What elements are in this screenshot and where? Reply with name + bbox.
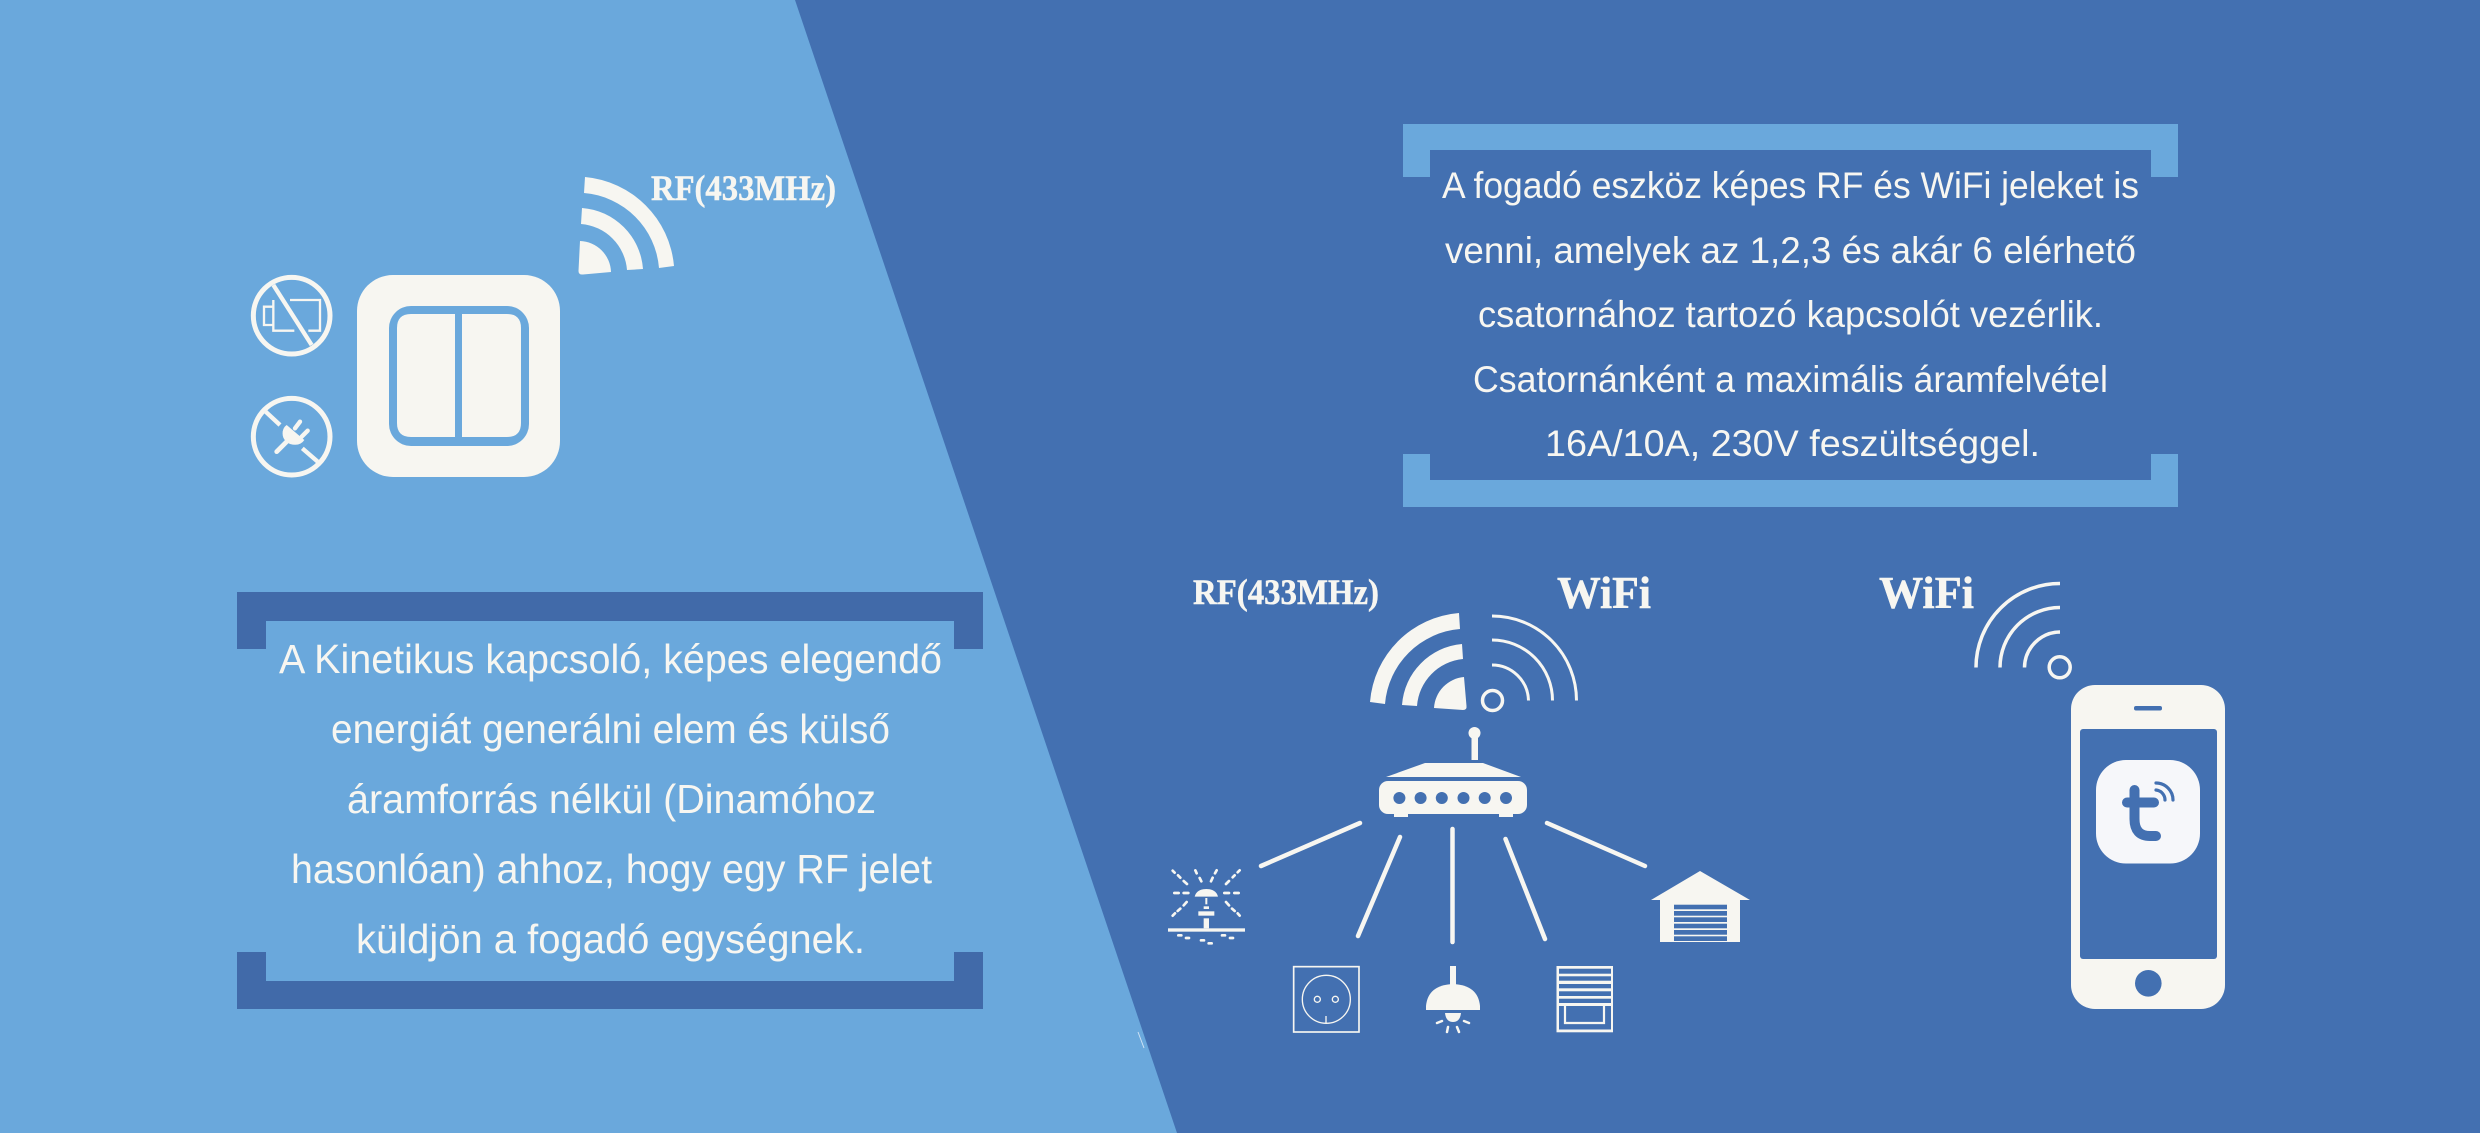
text block: receiver: Csatornánként a maximális áramfelvétel <box>1473 358 2108 400</box>
icon: smartphone <box>2071 685 2225 1009</box>
icon: router <box>1379 727 1527 817</box>
text block: kinetic switch <box>279 636 942 962</box>
label: WiFi: WiFi <box>1557 568 1651 618</box>
text block: kinetic switch: áramforrás nélkül (Dinamóhoz <box>347 776 876 822</box>
label: RF 433MHz: RF(433MHz) <box>1193 572 1379 612</box>
icon: WiFi signal waves <box>1482 616 1576 710</box>
bracket frame bottom <box>1403 454 2178 507</box>
bracket frame top <box>1403 124 2178 177</box>
icon: roller shutter <box>1556 966 1613 1032</box>
icon: RF signal waves <box>1370 613 1467 710</box>
text block: kinetic switch: hasonlóan) ahhoz, hogy egy RF jelet <box>291 846 933 892</box>
text block: kinetic switch: küldjön a fogadó egységnek. <box>356 916 865 962</box>
icon: WiFi signal waves <box>1976 584 2070 678</box>
label: RF 433MHz: RF(433MHz) <box>651 168 836 208</box>
bracket frame top <box>237 592 983 649</box>
connector lines <box>1261 823 1645 942</box>
text block: receiver: 16A/10A, 230V feszültséggel. <box>1545 422 2040 464</box>
diagram: smartphone app over WiFi <box>1879 568 2225 1009</box>
icon: app logo <box>2096 760 2200 864</box>
panel: receiver description <box>1403 124 2178 507</box>
text block: receiver <box>1442 164 2139 464</box>
diagram: router with connected devices <box>1168 568 1750 1032</box>
icon: wall switch <box>357 275 560 477</box>
panel: kinetic switch description <box>237 592 983 1009</box>
icon: ceiling lamp <box>1426 966 1480 1032</box>
icon: garage <box>1651 871 1750 942</box>
text block: receiver: venni, amelyek az 1,2,3 és akár 6 elérhető <box>1445 229 2136 271</box>
text block: receiver: A fogadó eszköz képes RF és WiFi jeleket is <box>1442 164 2139 206</box>
icon: wall socket <box>1294 967 1359 1032</box>
dark diagonal background panel <box>795 0 2480 1133</box>
panel: kinetic switch icons <box>253 168 836 477</box>
text block: kinetic switch: energiát generálni elem és külső <box>331 706 890 752</box>
text block: kinetic switch: A Kinetikus kapcsoló, képes elegendő <box>279 636 942 682</box>
label: WiFi: WiFi <box>1879 568 1974 618</box>
icon: no external power plug <box>253 398 330 475</box>
text block: receiver: csatornához tartozó kapcsolót vezérlik. <box>1478 293 2103 335</box>
icon: garden light <box>1168 870 1245 943</box>
icon: no battery <box>253 277 330 354</box>
icon: RF signal waves <box>578 177 674 275</box>
bracket frame bottom <box>237 952 983 1009</box>
